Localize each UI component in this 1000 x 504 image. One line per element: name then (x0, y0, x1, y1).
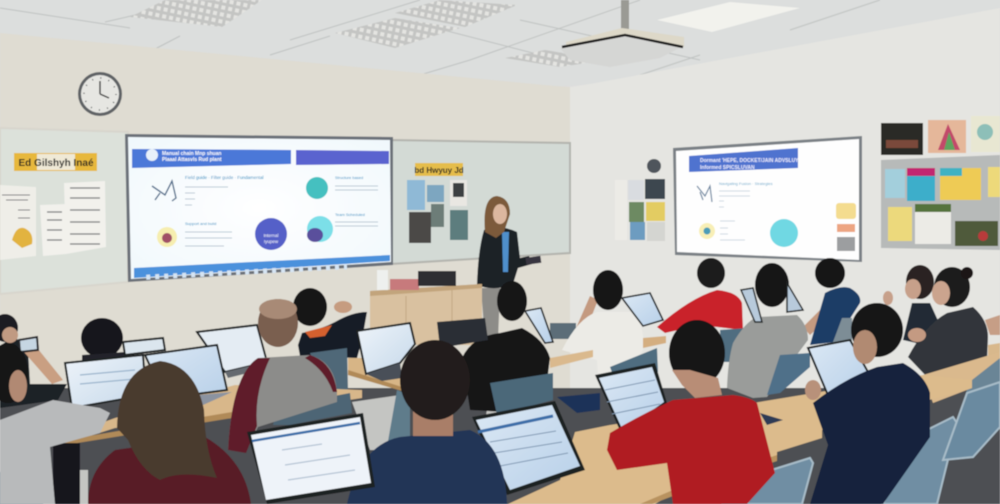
right screen text rows (719, 181, 773, 240)
right projection screen (673, 136, 862, 262)
student: red hoodie (607, 320, 775, 504)
right screen cyan circle (770, 219, 798, 247)
screen header bars: Manual chain Mnp shuan (162, 151, 221, 157)
teacher jacket (477, 227, 532, 288)
laptop: centre row 1 (525, 308, 553, 343)
label: yellow board sign: Ed Gilshyh Inaé (18, 158, 94, 169)
student: navy shirt (803, 258, 860, 345)
right wall (570, 8, 1000, 400)
ceiling light 2 (335, 18, 460, 48)
left wall (0, 33, 570, 400)
student: black shirt (462, 281, 550, 412)
teacher (477, 196, 541, 340)
poster row: right wall (881, 116, 1000, 155)
screen header bars (132, 149, 389, 168)
student: long-haired woman (88, 361, 251, 504)
label: yellow sign: bd Hwyuy Jd (414, 166, 464, 175)
student: orange collar with dark jacket (293, 288, 367, 358)
label: yellow sign (414, 163, 464, 176)
desk: centre row left (348, 358, 402, 391)
desk: right top (923, 352, 1000, 403)
laptop: left row 3 (65, 355, 146, 408)
chair: front left (0, 467, 42, 504)
desk: far right (643, 336, 666, 348)
laptop: left row small (123, 338, 165, 355)
teacher face (493, 204, 507, 224)
ceiling light 4 (505, 50, 605, 67)
student: woman plaid (883, 265, 940, 345)
label: yellow board sign (14, 153, 97, 171)
chair: gap centre (387, 390, 410, 448)
phone and tablet on desk (760, 413, 783, 425)
screen: purple badge (255, 218, 287, 250)
chair: centre (490, 373, 553, 415)
screen: circle chart cyan (307, 216, 333, 242)
teacher shirt (502, 232, 509, 272)
whiteboard: centre (390, 140, 570, 264)
wall clock (78, 72, 122, 116)
laptop: mid right (595, 363, 667, 435)
laptop: front left large (247, 413, 375, 504)
laptop: far row gray (741, 283, 803, 322)
paper: notes sheets (40, 181, 106, 256)
screen: task rows: Field guide · Filter guide · Fundamental (185, 175, 264, 180)
whiteboard: left (0, 128, 128, 294)
small wall clock (647, 159, 661, 173)
chair: far right (943, 382, 1000, 460)
teacher hair (484, 196, 510, 238)
left projection screen (125, 134, 393, 282)
screen: sketch icon (152, 181, 176, 201)
chair: front (723, 458, 813, 504)
laptop: back row right (622, 293, 663, 326)
student: white shirt (562, 270, 643, 375)
student: bald man raglan sweater (228, 299, 337, 453)
screen: purple badge: Internal (263, 233, 279, 238)
floor light patches (53, 395, 500, 504)
laptop: far left small (19, 337, 38, 352)
laptop: front centre (472, 401, 585, 495)
screen header bars: Plaaal Attasvls Rud plant (162, 157, 222, 163)
chair: bald student (273, 393, 352, 425)
right screen header: Informed SPICSLUVAN (700, 165, 755, 171)
student: right edge (985, 315, 1000, 335)
student: gray t-shirt (727, 263, 808, 398)
floor (0, 388, 1000, 504)
right screen side stickers (836, 203, 856, 251)
student: front centre navy (347, 340, 507, 504)
screen: yellow flower icon (157, 227, 177, 247)
screen: task rows (185, 175, 378, 246)
screen: task rows: Team Scheduled (335, 212, 365, 217)
screen: circle chart teal (306, 177, 328, 199)
student: back row dark head (81, 318, 130, 365)
student: gray sweatshirt left (0, 343, 110, 504)
teacher legs (481, 288, 500, 340)
dark legs left (53, 443, 80, 504)
chair: right (767, 353, 810, 395)
projector (560, 0, 685, 67)
right screen sketch (697, 186, 712, 202)
ceiling light 3 (395, 0, 517, 27)
right screen header (689, 148, 799, 172)
far left student (0, 314, 67, 408)
bulletin board (881, 155, 1000, 250)
desk: right front (508, 375, 972, 504)
student: red polo (657, 258, 743, 333)
teacher tablet (526, 256, 541, 265)
student: woman with bun (908, 267, 988, 378)
chair seat navy (557, 393, 600, 413)
laptop: centre dark (437, 318, 488, 348)
laptop: centre row 2 (357, 323, 415, 381)
screen: task rows: Support and build (185, 221, 216, 226)
paper: chicken worksheet (0, 185, 36, 260)
desk: far right corner (988, 343, 1000, 358)
chair: front right 1 (883, 417, 957, 504)
screen: purple badge: Iyupew (264, 239, 279, 244)
chairs: rear (310, 318, 1000, 407)
desk: centre row right (550, 350, 593, 368)
desk: left row (65, 385, 362, 445)
laptop: right (808, 340, 868, 400)
laptop: left row 2 (145, 345, 232, 405)
ceiling (0, 0, 1000, 86)
laptop: left row 1 (197, 325, 268, 378)
ceiling light 5 (657, 2, 800, 32)
right screen header: Dormant 'HEPE, DOCKET/JAIN ADVSLUY (700, 158, 799, 164)
right wall posters small (615, 179, 665, 241)
cabinet (370, 270, 482, 345)
posters: centre board (407, 180, 468, 243)
right screen yellow icon (699, 223, 715, 239)
screen: task rows: Structure based (335, 175, 363, 180)
student: navy hoodie (805, 303, 930, 504)
screen: taskbar (134, 255, 390, 278)
ceiling light 1 (130, 0, 262, 27)
right screen text rows: Navigating Fusion · Strategies (719, 181, 773, 186)
rear chair by white shirt (550, 323, 576, 339)
